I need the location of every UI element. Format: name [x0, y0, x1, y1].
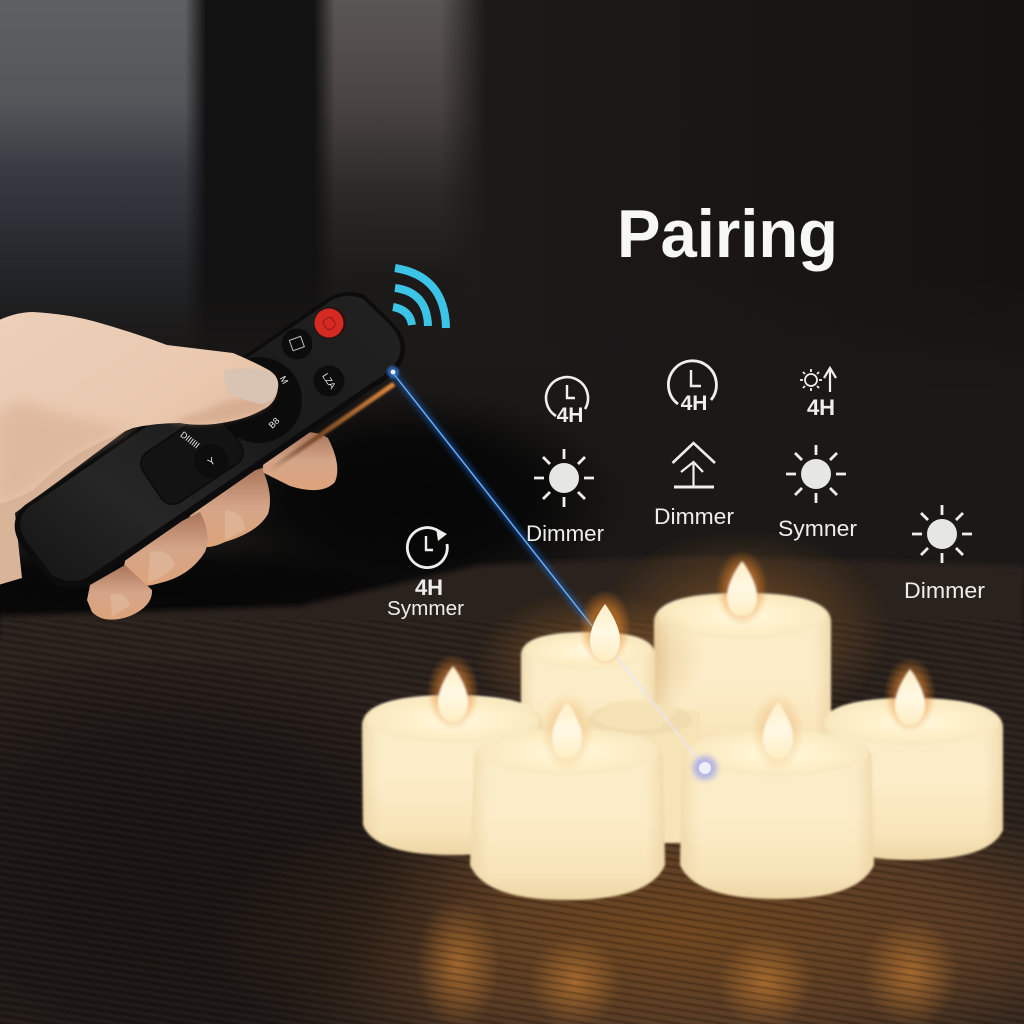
label: Dimmer, second: Dimmer — [654, 504, 734, 529]
centre low candle — [586, 700, 700, 843]
icon: dim up arrow — [672, 443, 715, 487]
panel label: DIIIIII — [178, 429, 202, 451]
label: Symmer: Symmer — [387, 598, 464, 620]
icon: brightness up 4H: 4H — [807, 395, 835, 420]
hand holding remote — [0, 292, 405, 620]
lower fingers — [87, 432, 337, 620]
label: Symner: Symner — [778, 516, 857, 541]
icon: clock 4H, first: 4H — [557, 404, 583, 427]
icon: brightness up 4H — [800, 368, 836, 420]
main dial — [216, 357, 302, 443]
icon: sun dimmer, right — [912, 505, 972, 563]
icon: clock 4H, first — [546, 377, 588, 427]
back-right candle — [592, 530, 892, 770]
side button — [314, 366, 344, 396]
square button — [282, 328, 312, 360]
orange edge glow — [270, 384, 394, 470]
red button — [314, 307, 346, 339]
lower button — [194, 444, 228, 478]
wooden table — [0, 556, 1024, 1024]
title: Pairing — [617, 196, 838, 272]
icon: wireless signal — [393, 268, 446, 328]
skin behind remote — [0, 400, 140, 586]
icon: clock with refresh arrow — [407, 528, 447, 568]
icon: sun symner — [786, 445, 846, 503]
fingernails — [110, 510, 245, 617]
icon: sun dimmer, first — [534, 449, 594, 507]
label: Dimmer, right: Dimmer — [904, 578, 985, 603]
label: Dimmer, first: Dimmer — [526, 521, 604, 546]
left candle — [362, 654, 543, 855]
candle group — [362, 530, 1003, 900]
signal beam from remote to candle — [393, 373, 717, 780]
remote control — [15, 292, 405, 589]
right candle — [821, 657, 1003, 860]
infrared emitter — [387, 366, 399, 378]
palm and thumb — [0, 312, 278, 505]
front-left candle — [470, 692, 665, 900]
label: 4H: 4H — [415, 575, 443, 600]
icon: clock 4H, second: 4H — [681, 392, 707, 415]
back-middle candle — [475, 590, 705, 760]
dial label upper: M — [278, 374, 290, 386]
dial label lower: B8 — [267, 416, 281, 430]
side button: LZA — [320, 371, 338, 391]
thumbnail — [224, 368, 277, 404]
icon: clock 4H, second — [668, 361, 716, 415]
lower button: Y — [206, 456, 218, 469]
front-right candle — [680, 692, 874, 899]
back-middle candle flame — [579, 590, 631, 666]
control panel recess — [135, 406, 249, 510]
